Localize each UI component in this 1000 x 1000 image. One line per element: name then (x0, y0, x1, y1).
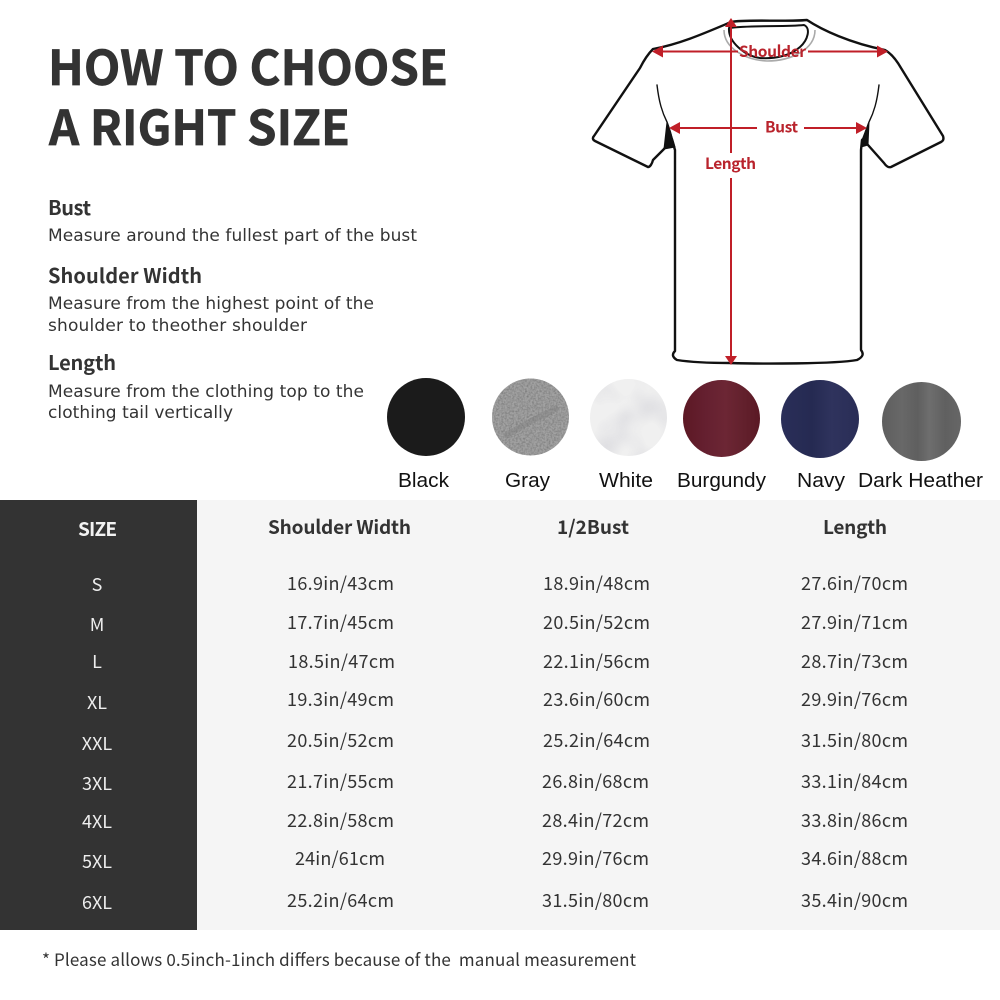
length values: 31.5in/80cm (801, 727, 908, 753)
length values (801, 570, 908, 913)
table headers: Length (823, 513, 887, 540)
size labels: 4XL (82, 808, 112, 834)
armhole shading (657, 85, 879, 149)
bust values: 28.4in/72cm (542, 807, 649, 833)
size labels: L (92, 648, 102, 674)
colour labels: Burgundy (677, 470, 766, 492)
size labels: 6XL (82, 889, 112, 915)
bust values: 29.9in/76cm (542, 845, 649, 871)
length values: 34.6in/88cm (801, 845, 908, 871)
bust description: Measure around the fullest part of the bust (48, 226, 417, 246)
bust heading: Bust (48, 192, 92, 221)
swatch: black (387, 378, 465, 456)
size labels: M (90, 611, 104, 637)
bust values: 22.1in/56cm (543, 648, 650, 674)
bust values: 26.8in/68cm (542, 768, 649, 794)
shoulder width values: 21.7in/55cm (287, 768, 394, 794)
size labels: S (92, 571, 102, 597)
shoulder width values: 20.5in/52cm (287, 727, 394, 753)
colour swatches (387, 378, 961, 461)
shoulder width values: 16.9in/43cm (287, 570, 394, 596)
size column background (0, 500, 197, 930)
title: A RIGHT SIZE (48, 89, 350, 159)
colour labels: Black (398, 470, 450, 492)
size table (0, 500, 1000, 930)
t-shirt diagram (593, 18, 943, 365)
length values: 29.9in/76cm (801, 686, 908, 712)
swatch: white (590, 379, 667, 456)
bust values: 31.5in/80cm (542, 887, 649, 913)
colour labels: Gray (505, 470, 550, 492)
bust values: 23.6in/60cm (543, 686, 650, 712)
length description: Measure from the clothing top to the (48, 382, 364, 402)
table headers (78, 513, 887, 542)
text block: measurement guide (48, 192, 417, 423)
bust values: 25.2in/64cm (543, 727, 650, 753)
table headers: Shoulder Width (268, 513, 411, 540)
arrow labels (705, 40, 806, 174)
arrow labels: Bust (765, 116, 798, 138)
bust values: 18.9in/48cm (543, 570, 650, 596)
length values: 28.7in/73cm (801, 648, 908, 674)
bust values: 20.5in/52cm (543, 609, 650, 635)
length values: 35.4in/90cm (801, 887, 908, 913)
size labels (82, 571, 112, 915)
shoulder width values: 24in/61cm (295, 845, 385, 871)
table background (197, 500, 1000, 930)
size labels: 5XL (82, 848, 112, 874)
title: HOW TO CHOOSE (48, 29, 448, 99)
shoulder width values (287, 570, 395, 913)
bust values (542, 570, 650, 913)
size labels: XL (87, 689, 107, 715)
length values: 33.8in/86cm (801, 807, 908, 833)
shoulder width values: 25.2in/64cm (287, 887, 394, 913)
length values: 33.1in/84cm (801, 768, 908, 794)
red measurement arrows (652, 18, 888, 365)
length values: 27.6in/70cm (801, 570, 908, 596)
swatch: gray (492, 378, 569, 456)
length heading: Length (48, 347, 116, 376)
length description: clothing tail vertically (48, 403, 233, 423)
table headers: SIZE (78, 515, 117, 542)
colour labels (398, 470, 983, 492)
length values: 27.9in/71cm (801, 609, 908, 635)
arrow labels: Shoulder (739, 40, 806, 62)
table headers: 1/2Bust (557, 513, 629, 540)
shoulder width values: 19.3in/49cm (287, 686, 394, 712)
swatch: burgundy (683, 380, 760, 457)
colour labels: White (599, 470, 653, 492)
title (48, 29, 448, 159)
shoulder width description (48, 294, 374, 336)
colour labels: Navy (797, 470, 845, 492)
shirt outline (593, 20, 943, 364)
colour labels: Dark Heather (858, 470, 983, 492)
swatch: navy (781, 380, 859, 458)
shoulder width description: Measure from the highest point of the (48, 294, 374, 314)
length description (48, 382, 364, 423)
shoulder width values: 22.8in/58cm (287, 807, 394, 833)
collar shadow (724, 30, 815, 61)
footnote: * Please allows 0.5inch-1inch differs because of the manual measurement (42, 946, 637, 971)
arrow labels: Length (705, 152, 756, 174)
shoulder width values: 17.7in/45cm (287, 609, 394, 635)
size labels: 3XL (82, 770, 112, 796)
shoulder width heading: Shoulder Width (48, 260, 202, 289)
swatch: dark heather (882, 382, 961, 461)
shoulder width description: shoulder to theother shoulder (48, 316, 307, 336)
shoulder width values: 18.5in/47cm (288, 648, 395, 674)
size labels: XXL (82, 730, 112, 756)
